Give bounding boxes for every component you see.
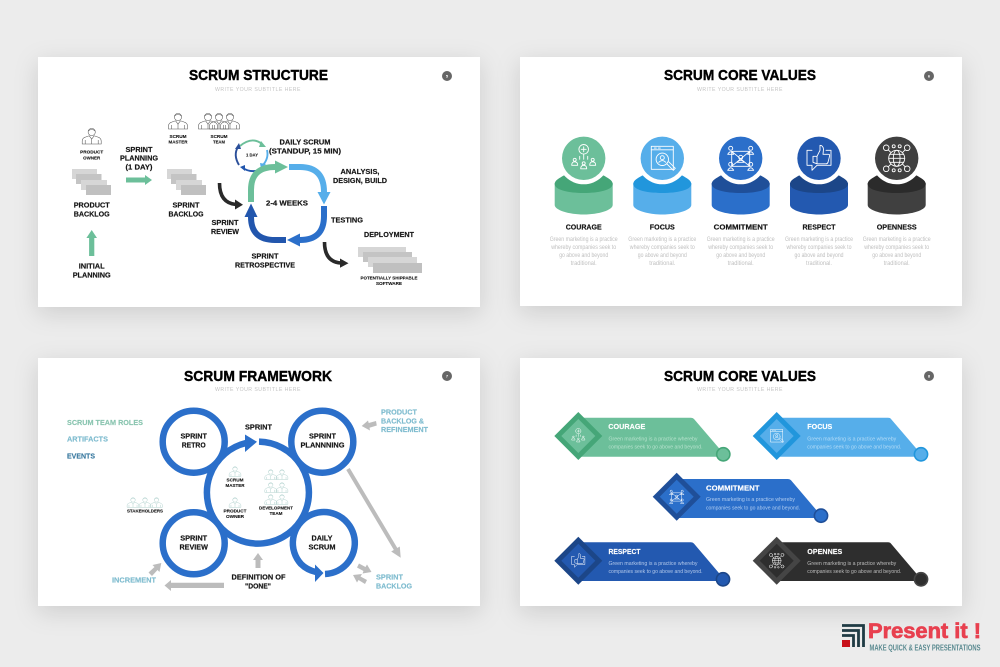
label: sprint review <box>211 218 240 236</box>
product backlog stack <box>72 169 111 195</box>
role: development team: DEVELOPMENT <box>259 506 293 510</box>
value: openness: Green marketing is a practice <box>863 236 931 243</box>
label: sprint planning <box>120 145 158 172</box>
role: product owner: OWNER <box>226 514 245 519</box>
label: product owner: PRODUCT <box>80 150 104 154</box>
label: scrum master <box>168 134 188 144</box>
circle: sprint review <box>163 512 225 574</box>
arrow: to increment <box>164 580 224 591</box>
arrow: backlog to planning <box>362 420 377 430</box>
label: scrum team: TEAM <box>213 140 225 144</box>
banner: courage: companies seek to go above and beyond. <box>608 445 703 451</box>
circle: sprint review: REVIEW <box>179 542 209 552</box>
value: respect: Green marketing is a practice <box>785 236 853 243</box>
role: stakeholders: STAKEHOLDERS <box>127 508 163 514</box>
role: scrum master: SCRUM <box>226 478 244 482</box>
arrow: initial planning up <box>86 230 97 256</box>
label: sprint: SPRINT <box>245 422 272 432</box>
circle: sprint review: SPRINT <box>180 534 208 542</box>
title: SCRUM FRAMEWORK <box>184 369 332 385</box>
value: commitment: traditional. <box>728 260 754 267</box>
value: respect: RESPECT <box>802 222 836 232</box>
banner: respect <box>554 537 730 586</box>
label: product backlog and refinement <box>381 408 428 434</box>
banner: focus: Green marketing is a practice whereby <box>807 436 896 442</box>
banner: respect: companies seek to go above and beyond. <box>608 569 703 575</box>
sprint cycle arrows <box>244 160 330 246</box>
banner: focus: companies seek to go above and beyond. <box>807 445 902 451</box>
banner: respect: RESPECT <box>608 547 641 556</box>
label: sprint retrospective <box>235 252 295 270</box>
banner: courage: COURAGE <box>608 422 645 431</box>
value: openness: traditional. <box>884 260 910 267</box>
label: sprint planning: PLANNING <box>120 154 158 162</box>
legend: EVENTS <box>67 452 95 460</box>
logo mark <box>842 626 864 647</box>
software stack <box>358 247 422 273</box>
label: product backlog and refinement: BACKLOG & <box>381 416 425 426</box>
icon: product owner <box>82 128 101 144</box>
role: development team: TEAM <box>270 511 283 516</box>
arrow: sprint planning right <box>126 175 152 185</box>
label: product backlog <box>74 200 110 218</box>
label: product backlog: PRODUCT <box>74 200 110 210</box>
label: sprint backlog: SPRINT <box>172 200 200 210</box>
arrow: to review from increment <box>148 563 161 576</box>
circle: sprint planning: SPRINT <box>309 432 336 440</box>
banner: courage: Green marketing is a practice whereby <box>608 436 698 442</box>
value: courage: traditional. <box>571 260 597 267</box>
arrow: done up <box>253 553 263 568</box>
subtitle: WRITE YOUR SUBTITLE HERE <box>697 387 783 393</box>
page badge: 6 <box>928 74 931 78</box>
banner: openness: companies seek to go above and beyond. <box>807 569 902 575</box>
label: scrum master: MASTER <box>168 140 188 144</box>
value: courage: go above and beyond <box>559 252 609 259</box>
circle: sprint planning: PLANNNING <box>300 440 345 450</box>
arrow: black curve to deployment <box>324 242 348 268</box>
label: definition of done <box>232 572 286 590</box>
value: focus: traditional. <box>649 260 676 267</box>
role: product owner: PRODUCT <box>224 508 247 514</box>
value: courage: COURAGE <box>566 222 602 232</box>
circle: daily scrum: SCRUM <box>308 542 336 552</box>
banner: respect: Green marketing is a practice whereby <box>608 561 698 567</box>
legend: SCRUM TEAM ROLES <box>67 418 143 427</box>
value: commitment: go above and beyond <box>716 252 766 259</box>
label: scrum team: SCRUM <box>210 134 228 139</box>
label: daily scrum <box>269 138 342 156</box>
label: testing: TESTING <box>331 216 363 224</box>
label: product backlog and refinement: PRODUCT <box>381 408 417 416</box>
value: openness <box>863 132 931 267</box>
title: SCRUM CORE VALUES <box>664 369 816 385</box>
logo: present it <box>842 620 981 652</box>
label: definition of done: "DONE" <box>245 582 271 590</box>
label: potentially shippable software: SOFTWARE <box>376 281 402 286</box>
logo wordmark: Present it ! <box>868 620 981 643</box>
circle: daily scrum: DAILY <box>312 534 332 542</box>
page badge <box>924 371 934 381</box>
role: stakeholders <box>127 498 163 514</box>
label: sprint review: REVIEW <box>211 227 240 236</box>
banner: commitment: companies seek to go above and beyond. <box>706 506 800 512</box>
label: initial planning <box>73 262 111 280</box>
label: sprint retrospective: RETROSPECTIVE <box>235 260 295 270</box>
label: sprint backlog: BACKLOG <box>376 582 412 590</box>
page badge <box>924 71 934 81</box>
label: sprint backlog <box>168 200 204 218</box>
label: product owner <box>80 150 104 160</box>
central sprint ring <box>207 434 309 544</box>
subtitle: WRITE YOUR SUBTITLE HERE <box>697 87 783 93</box>
label: sprint retrospective: SPRINT <box>252 252 279 260</box>
banner: commitment: Green marketing is a practice whereby <box>706 497 795 503</box>
value: courage <box>550 132 618 267</box>
label: deployment: DEPLOYMENT <box>364 230 414 239</box>
value: focus: whereby companies seek to <box>629 244 695 251</box>
label: daily scrum: (STANDUP, 15 MIN) <box>269 146 342 156</box>
circle: daily scrum <box>293 512 355 582</box>
value: respect: whereby companies seek to <box>786 244 852 251</box>
value: respect <box>785 132 853 267</box>
arrow: backlog exchange left <box>353 574 367 584</box>
banner: courage <box>554 412 730 461</box>
circle: sprint retro: SPRINT <box>180 432 207 440</box>
subtitle: WRITE YOUR SUBTITLE HERE <box>215 387 301 393</box>
label: product owner: OWNER <box>83 156 101 160</box>
title: SCRUM CORE VALUES <box>664 68 816 84</box>
label: potentially shippable software: POTENTIALLY SHIPPABLE <box>360 276 418 280</box>
value: respect: traditional. <box>806 260 832 267</box>
circle: sprint retro <box>163 411 225 473</box>
label: scrum master: SCRUM <box>170 134 187 139</box>
value: focus: go above and beyond <box>638 252 687 259</box>
label: potentially shippable software <box>360 276 418 286</box>
circle: sprint retro: RETRO <box>182 440 206 450</box>
label: product backlog and refinement: REFINEMENT <box>381 425 428 434</box>
value: commitment <box>707 132 775 267</box>
page badge: 8 <box>928 374 931 378</box>
label: initial planning: INITIAL <box>79 262 105 270</box>
label: sprint planning: SPRINT <box>126 145 153 154</box>
banner: openness: OPENNES <box>807 547 842 556</box>
page badge <box>442 371 452 381</box>
label: analysis design build: DESIGN, BUILD <box>333 176 388 185</box>
value: openness: OPENNESS <box>877 222 917 232</box>
subtitle: WRITE YOUR SUBTITLE HERE <box>215 87 301 93</box>
value: commitment: whereby companies seek to <box>707 244 774 251</box>
banner: focus: FOCUS <box>807 422 832 431</box>
circle: sprint planning <box>291 411 353 473</box>
value: focus: FOCUS <box>650 222 675 232</box>
role: scrum master: MASTER <box>226 483 245 488</box>
arrow: black curve to cycle <box>220 183 243 210</box>
arrow: planning to sprint backlog <box>348 469 401 558</box>
value: commitment: COMMITMENT <box>714 222 768 232</box>
banner: commitment <box>653 473 828 522</box>
label: sprint backlog: BACKLOG <box>168 210 204 218</box>
sprint backlog stack <box>167 169 206 195</box>
label: definition of done: DEFINITION OF <box>232 572 286 582</box>
icon: 1 day cycle: 1 DAY <box>246 152 258 158</box>
value: respect: go above and beyond <box>794 252 844 259</box>
label: initial planning: PLANNING <box>73 270 111 280</box>
label: scrum team <box>210 134 228 144</box>
label: 2-4 weeks: 2-4 WEEKS <box>266 198 308 208</box>
label: analysis design build <box>333 167 388 185</box>
icon: scrum team <box>198 113 240 129</box>
label: analysis design build: ANALYSIS, <box>340 167 380 176</box>
panel: scrum structure <box>38 57 480 307</box>
label: product backlog: BACKLOG <box>74 210 110 218</box>
value: courage: Green marketing is a practice <box>550 236 618 243</box>
role: product owner <box>224 498 247 519</box>
panel: scrum framework <box>38 358 480 606</box>
value: openness: go above and beyond <box>872 252 922 259</box>
page badge: 7 <box>446 374 449 378</box>
icon: scrum master <box>168 113 188 129</box>
icon: 1 day cycle <box>235 140 268 171</box>
banner: openness <box>753 537 928 586</box>
value: commitment: Green marketing is a practice <box>707 236 775 243</box>
value: focus <box>628 132 697 267</box>
banner: commitment: COMMITMENT <box>706 484 760 492</box>
label: increment: INCREMENT <box>112 576 156 584</box>
role: scrum master <box>226 467 245 488</box>
label: sprint planning: (1 DAY) <box>126 162 153 172</box>
value: focus: Green marketing is a practice <box>628 236 697 243</box>
label: sprint review: SPRINT <box>212 218 239 227</box>
label: sprint backlog <box>376 572 412 590</box>
role: development team <box>259 470 293 516</box>
page badge <box>442 71 452 81</box>
banner: openness: Green marketing is a practice whereby <box>807 561 896 567</box>
legend: ARTIFACTS <box>67 434 108 444</box>
label: daily scrum: DAILY SCRUM <box>280 138 330 146</box>
banner: focus <box>753 412 928 461</box>
panel: scrum core values cylinders <box>520 57 962 306</box>
title: SCRUM STRUCTURE <box>189 68 328 84</box>
value: openness: whereby companies seek to <box>863 244 930 251</box>
label: sprint backlog: SPRINT <box>376 572 403 582</box>
value: courage: whereby companies seek to <box>550 244 617 251</box>
arrow: backlog exchange right <box>357 564 372 574</box>
panel: scrum core values banners <box>520 358 962 606</box>
page badge: 5 <box>446 74 449 78</box>
legend <box>67 418 143 460</box>
